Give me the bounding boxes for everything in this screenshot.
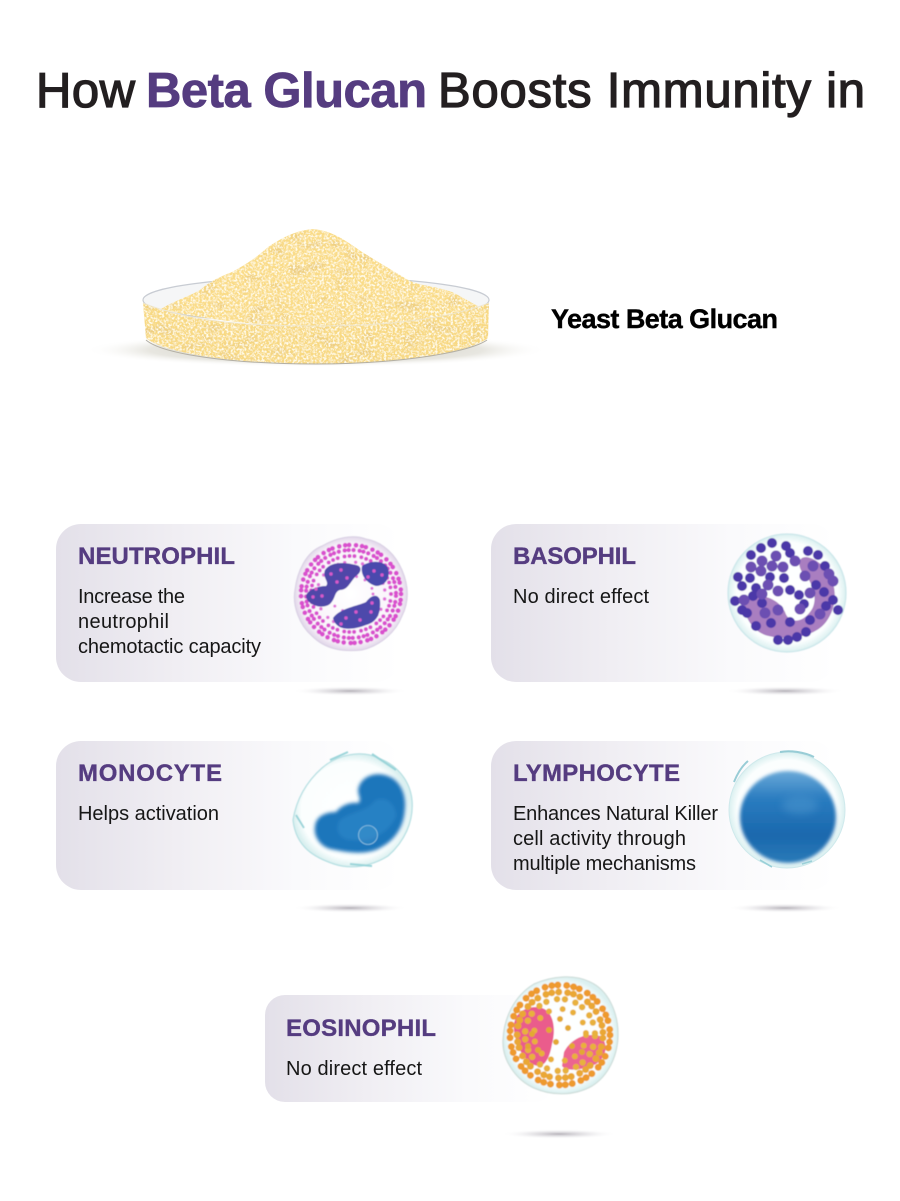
description: Helps activation [78, 803, 219, 825]
description: No direct effect [286, 1058, 422, 1080]
dish shadow [84, 333, 548, 367]
dish rim [143, 277, 489, 323]
title [36, 64, 865, 118]
title: Beta Glucan [146, 64, 427, 118]
panel: basophil [491, 524, 846, 696]
description: chemotactic capacity [78, 636, 261, 658]
description: Enhances Natural Killer [513, 803, 718, 825]
shadow [292, 903, 408, 913]
description: neutrophil [78, 611, 169, 633]
icon: basophil cell [728, 534, 846, 652]
icon: lymphocyte cell [729, 751, 845, 868]
label: Yeast Beta Glucan: Yeast Beta Glucan [551, 304, 778, 334]
title: How [36, 64, 136, 118]
nucleus [514, 1007, 554, 1066]
heading: LYMPHOCYTE [513, 760, 680, 787]
granules [510, 985, 610, 1085]
description [78, 586, 261, 658]
dish glass lines [143, 303, 489, 326]
heading: NEUTROPHIL [78, 543, 235, 570]
description: cell activity through [513, 828, 686, 850]
title: Boosts Immunity in [438, 64, 865, 118]
card background [265, 995, 555, 1102]
card background [56, 741, 401, 890]
panel: neutrophil [56, 524, 408, 696]
shadow [727, 903, 843, 913]
powder in dish side [143, 303, 489, 364]
description: Increase the [78, 586, 185, 608]
heading: BASOPHIL [513, 543, 636, 570]
panel: lymphocyte [491, 741, 845, 913]
heading: EOSINOPHIL [286, 1015, 436, 1042]
shadow [501, 1129, 617, 1139]
description [513, 803, 718, 875]
panel: eosinophil [265, 977, 618, 1139]
card background [491, 741, 836, 890]
icon: neutrophil cell [294, 537, 407, 651]
description: multiple mechanisms [513, 853, 696, 875]
card background [56, 524, 401, 682]
icon: eosinophil cell [503, 977, 618, 1094]
shadow [725, 686, 845, 696]
heading: MONOCYTE [78, 760, 222, 787]
card background [491, 524, 836, 682]
description: No direct effect [513, 586, 649, 608]
shadow [292, 686, 408, 696]
panel: monocyte [56, 741, 412, 913]
granules [735, 543, 838, 640]
powder mound [161, 229, 478, 326]
icon: monocyte cell [293, 752, 412, 867]
image: petri dish of yeast beta glucan powder [84, 229, 548, 367]
nucleus [306, 563, 360, 607]
nucleus [744, 557, 835, 638]
